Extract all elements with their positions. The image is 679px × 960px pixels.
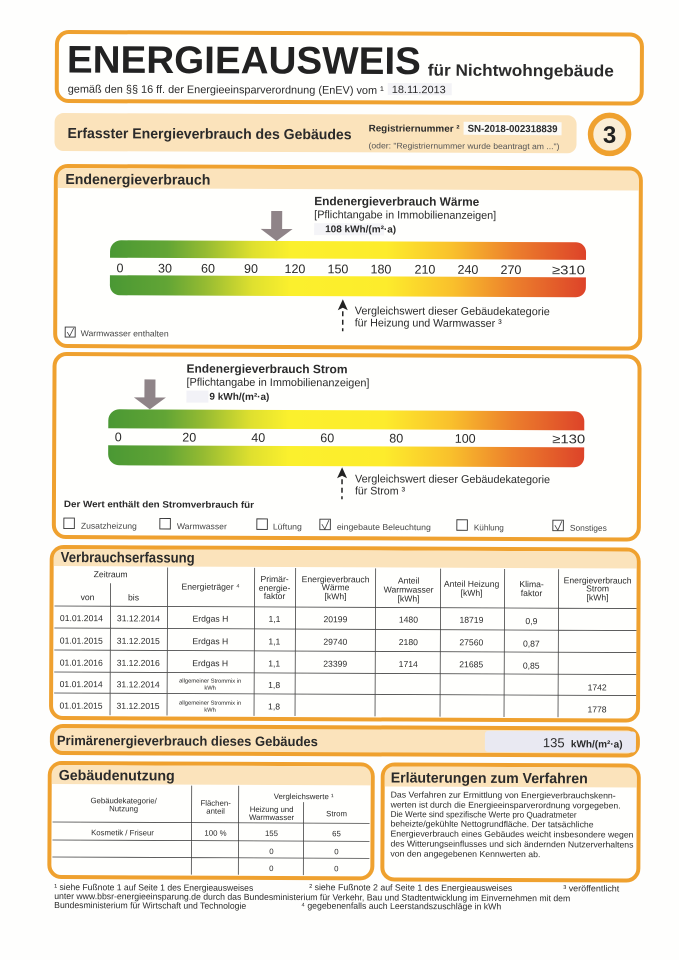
footnotes: unter www.bbsr-energieeinsparung.de durch das Bundesministerium für Verkehr, Bau und Stadtentwicklung im Einvernehmen mit dem [54,891,570,903]
panel heading: Endenergieverbrauch [65,172,210,189]
row 4 [60,678,607,693]
explanation text: werten ist durch die Energieeinsparverordnung vorgegeben. [390,799,621,810]
mandatory note: [Pflichtangabe in Immobilienanzeigen] [186,377,369,389]
row 1 [60,613,538,626]
row 1: 31.12.2014 [117,613,160,623]
title: ENERGIEAUSWEIS [67,39,421,83]
scale labels: ≥310 [552,263,585,277]
explanation text: Energieverbrauch eines Gebäudes weicht insbesondere wegen [390,828,634,840]
heat value: 108 kWh/(m²·a) [325,224,396,235]
table: building use: Kosmetik / Friseur [91,828,154,837]
row 3: 31.12.2016 [117,658,160,668]
row 1: Erdgas H [193,614,228,624]
table header: [kWh] [325,591,347,601]
row 1: 18719 [459,615,484,625]
table: building use: 100 % [204,829,227,838]
table header: Zeitraum [94,569,128,579]
row 5: 1,8 [268,701,280,711]
table: building use: Nutzung [109,804,138,813]
table header: [kWh] [398,594,420,604]
icon: comparison arrow [337,467,347,499]
primary energy value: kWh/(m²·a) [571,739,623,750]
scale labels: 0 [115,430,122,444]
electricity value: 9 kWh/(m²·a) [209,392,269,403]
row 3: 0,85 [523,661,540,671]
row 2: 27560 [459,637,484,647]
table: building use: Strom [326,809,347,818]
row 4: kWh [204,686,216,692]
scale labels: 30 [158,261,172,276]
panel header [52,765,371,785]
table header: Primär- [261,574,289,584]
row 4: 01.01.2014 [60,679,103,689]
row 5: 01.01.2015 [60,701,103,711]
panel header [385,766,637,788]
heat heading: Endenergieverbrauch Wärme [314,194,480,209]
primary energy value [485,731,636,753]
row 1: 1,1 [268,614,281,624]
table: building use: 155 [265,829,279,838]
table: consumption [54,567,637,718]
registration label: Registriernummer ² [369,123,460,135]
table: building use: 0 [269,864,274,873]
panel: building use [49,763,373,878]
scale labels: 90 [244,262,258,276]
table: building use: anteil [206,807,225,816]
row 3: 1,1 [268,658,280,668]
panel: primary energy [52,726,638,756]
row 2: 2180 [399,637,418,647]
table header: Anteil [398,576,419,586]
footnotes: Bundesministerium für Wirtschaft und Technologie [54,900,246,911]
row 1: 1480 [399,615,418,625]
table header: Energieträger ⁴ [181,582,240,592]
table header: bis [128,592,139,602]
scale labels: ≥130 [552,432,585,446]
comparison note: für Heizung und Warmwasser ³ [355,317,502,330]
checkbox row: Sonstiges [570,523,607,533]
electricity scope label: Der Wert enthält den Stromverbrauch für [64,499,254,510]
row 4: allgemeiner Strommix in [179,679,241,685]
table header: [kWh] [461,588,483,598]
row 4: 1742 [588,682,607,692]
scale labels: 100 [455,432,476,446]
panel: final energy electricity [54,354,640,540]
footnotes [54,881,620,912]
table header: Energieverbrauch [302,574,370,584]
panel header [58,168,639,191]
panel header [54,549,637,569]
icon: comparison arrow [338,299,348,331]
legal basis line: gemäß den §§ 16 ff. der Energieeinsparverordnung (EnEV) vom ¹ [68,84,384,97]
row 2: 01.01.2015 [60,636,103,646]
row 5: 1778 [587,704,607,714]
scale labels: 270 [501,263,521,277]
row 1: 0,9 [525,616,538,626]
scale bar: electricity [108,409,585,467]
icon: value arrow [261,211,293,241]
row 5: allgemeiner Strommix in [179,701,241,707]
scale labels [116,261,585,277]
row 3: 21685 [459,659,483,669]
scale labels: 60 [201,262,215,276]
row 2: Erdgas H [192,636,228,646]
explanation text: von den angegebenen Kennwerten ab. [390,848,540,859]
table: building use: 0 [334,847,339,856]
comparison note [355,305,550,330]
registration number: SN-2018-002318839 [468,124,558,135]
table header: energie- [259,583,290,593]
electricity value [186,391,269,403]
scale labels: 180 [371,262,391,276]
band heading: Erfasster Energieverbrauch des Gebäudes [68,126,352,143]
table: building use: Vergleichswerte ¹ [274,792,334,801]
scale labels: 150 [328,262,348,276]
icon: value arrow [134,379,166,409]
comparison note: für Strom ³ [355,485,405,498]
row 3: 1714 [399,659,418,669]
panel: title [57,32,642,104]
checkbox row: Warmwasser [177,521,227,531]
scale labels: 40 [251,431,265,445]
checkbox row [64,518,607,533]
mandatory note: [Pflichtangabe in Immobilienanzeigen] [314,209,496,222]
row 2: 0,87 [523,639,540,649]
checkbox row: Lüftung [273,521,302,532]
table: building use: Gebäudekategorie/ [90,796,158,805]
table header: Anteil Heizung [444,579,500,589]
table header: faktor [264,591,285,601]
comparison note [355,473,550,498]
row 3 [60,658,540,671]
scale labels: 210 [415,263,435,277]
row 2: 1,1 [268,636,281,646]
table: building use: 0 [269,847,274,856]
explanation text: des Witterungseinflusses und sich ändernden Nutzerverhaltens [390,838,633,850]
table header: Klima- [519,579,544,589]
footnotes: ² siehe Fußnote 2 auf Seite 1 des Energieausweises [309,882,513,893]
badge: page number [590,115,629,154]
primary energy value: 135 [543,735,565,750]
comparison note: Vergleichswert dieser Gebäudekategorie [355,473,550,486]
row 5: 31.12.2015 [117,701,160,711]
table header: von [81,592,95,602]
scale bar: heat [110,240,586,297]
table: building use [52,785,370,875]
row 3: Erdgas H [192,658,228,668]
badge: page number: 3 [603,122,616,149]
scale labels: 20 [182,431,196,445]
row 1: 01.01.2014 [60,613,103,623]
panel heading: Gebäudenutzung [59,768,175,785]
table header: Warmwasser [384,584,434,595]
explanation text: Die Werte sind spezifische Werte pro Quadratmeter [391,809,577,820]
explanation text: beheizte/gekühlte Nettogrundfläche. Der tatsächliche [391,818,594,829]
row 2: 29740 [323,637,348,647]
footnotes: ³ veröffentlicht [563,883,620,893]
primary energy heading: Primärenergieverbrauch dieses Gebäudes [57,733,318,749]
checkbox row: Zusatzheizung [81,521,137,531]
checkbox: hot water included: Warmwasser enthalten [81,328,169,339]
scale labels: 80 [389,431,403,446]
scale labels: 240 [458,263,478,277]
scale labels: 60 [320,431,334,445]
registration note: (oder: "Registriernummer wurde beantragt am ...") [368,141,560,151]
panel: consumption records [51,547,639,721]
scale labels [115,430,585,446]
scale labels: 0 [116,261,124,275]
table: building use: 0 [334,864,339,873]
row 4: 1,8 [268,680,280,690]
footnotes: ¹ siehe Fußnote 1 auf Seite 1 des Energieausweises [54,882,254,893]
row 2 [60,636,540,649]
table header: [kWh] [587,592,609,602]
panel: method explanation [382,764,639,881]
table: building use: Heizung und [250,805,294,814]
panel heading: Verbrauchserfassung [61,550,195,567]
panel heading: Erläuterungen zum Verfahren [391,770,588,787]
explanation text [389,789,634,860]
electricity heading: Endenergieverbrauch Strom [186,362,348,376]
comparison note: Vergleichswert dieser Gebäudekategorie [355,305,550,318]
row 3: 23399 [323,659,347,669]
checkbox row: Kühlung [474,522,504,532]
table: building use: 65 [332,829,342,838]
row 5 [60,700,607,715]
scale labels: 120 [285,262,305,276]
table header [81,569,632,605]
table: building use: Warmwasser [249,813,295,822]
row 5: kWh [204,708,216,714]
table header: faktor [521,588,542,598]
table: building use: Flächen- [200,799,231,808]
row 3: 01.01.2016 [60,658,103,668]
band: recorded energy consumption [54,113,577,153]
footnotes: ⁴ gegebenenfalls auch Leerstandszuschläge in kWh [301,901,501,911]
explanation text: Das Verfahren zur Ermittlung von Energieverbrauchskenn- [391,789,616,800]
panel: final energy heat [55,166,641,349]
subtitle: building type: für Nichtwohngebäude [428,62,614,80]
row 2: 31.12.2015 [117,636,160,646]
table header: Energieverbrauch [564,575,632,586]
row 1: 20199 [323,614,348,624]
table header: Strom [586,583,609,593]
table header: Wärme [322,582,350,592]
date field: 18.11.2013 [392,84,446,96]
checkbox row: eingebaute Beleuchtung [337,522,431,532]
row 4: 31.12.2014 [117,679,160,689]
